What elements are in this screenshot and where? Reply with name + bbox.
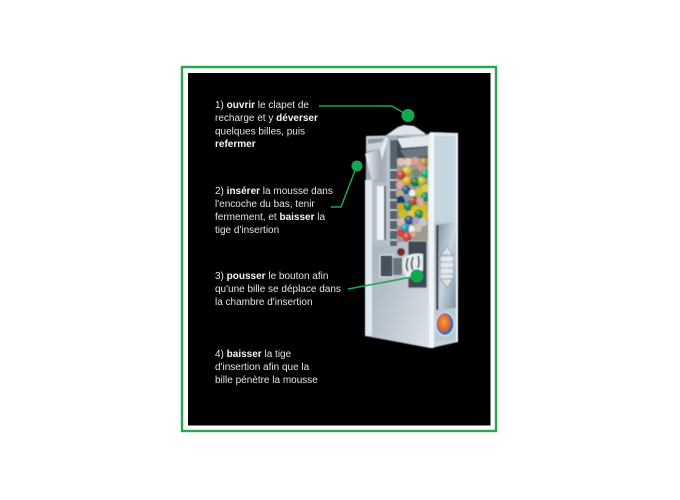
push button mechanism [403, 241, 427, 288]
text: step 2: fermement, et baisser la [215, 212, 326, 223]
leader line and dot: step 2 [331, 160, 362, 207]
insertion lever [365, 149, 381, 181]
insertion column [372, 140, 397, 246]
text: step 3 [215, 271, 341, 308]
text: step 2: 2) insérer la mousse dans [215, 186, 333, 197]
loaded ball [397, 248, 405, 256]
dispenser side panel [430, 132, 458, 348]
dispenser top dome [385, 125, 425, 137]
ball shading [396, 158, 430, 242]
text: step 3: qu'une bille se déplace dans [215, 284, 341, 295]
text: step 4 [215, 349, 318, 386]
text: step 1: quelques billes, puis [215, 126, 305, 138]
text: step 4: 4) baisser la tige [215, 349, 292, 360]
dispenser front face [365, 134, 430, 348]
text: step 1: refermer [215, 139, 256, 150]
dispenser illustration [365, 125, 458, 348]
text: step 2 [215, 186, 333, 236]
text: step 3: 3) pousser le bouton afin [215, 271, 328, 282]
leader line and dot: step 1 [319, 106, 414, 122]
text: step 4: bille pénètre la mousse [215, 375, 318, 386]
orange button [435, 310, 456, 341]
text: step 4: d'insertion afin que la [215, 362, 310, 373]
black panel [188, 73, 490, 426]
arrow control panel [436, 222, 456, 310]
text: step 2: l'encoche du bas, tenir [215, 199, 315, 210]
insertion notch [380, 255, 393, 277]
text: step 1 [215, 100, 318, 150]
coloured balls [396, 157, 430, 242]
top left cap [366, 136, 386, 151]
text: step 1: 1) ouvrir le clapet de [215, 100, 309, 111]
ball chamber [396, 136, 430, 244]
leader line and dot: step 3 [348, 270, 424, 289]
outer green frame [182, 67, 496, 431]
text: step 3: la chambre d'insertion [215, 297, 313, 308]
text: step 1: recharge et y déverser [215, 113, 318, 124]
text: step 2: tige d'insertion [215, 225, 279, 236]
